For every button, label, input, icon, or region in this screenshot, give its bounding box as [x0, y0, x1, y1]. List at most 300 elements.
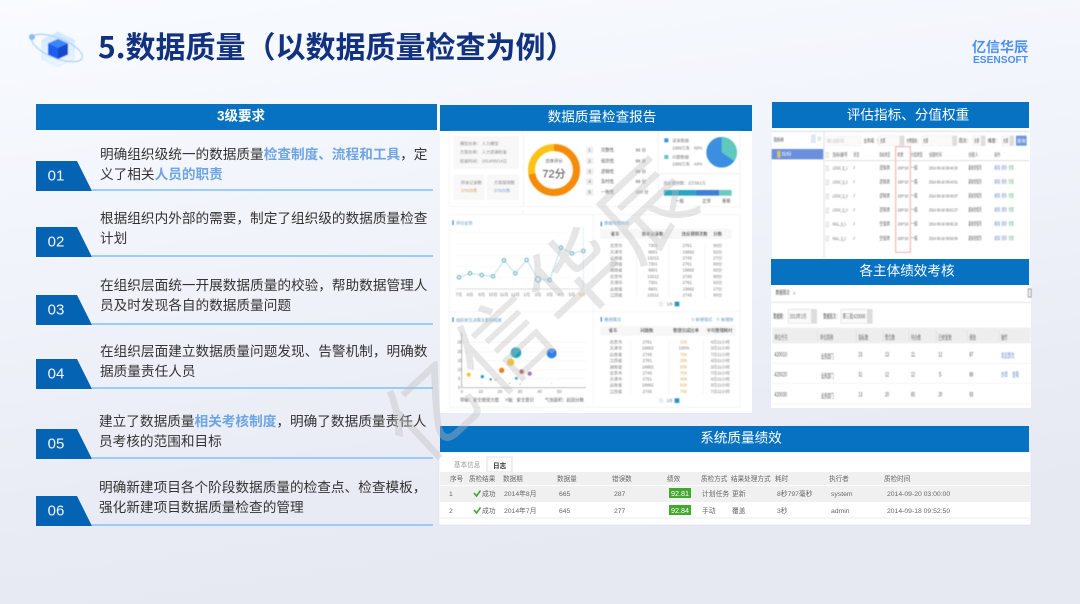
chart: violation stacked bar: 一般	[675, 197, 685, 204]
log table: 质检结果	[469, 474, 496, 483]
indicator table: 管理	[1009, 178, 1014, 185]
table: rectification status: 北京市	[610, 339, 622, 345]
report body background	[440, 131, 752, 413]
indicator table: LOGIC_Q_1	[833, 165, 848, 171]
score list	[586, 146, 649, 196]
heading: data quality report: 数据质量检查报告	[548, 110, 656, 124]
table: rectification status: 新增规式	[696, 316, 712, 322]
table: rectification status: 天津市	[610, 376, 622, 382]
table: 86	[969, 371, 974, 378]
score list: 88 分	[636, 157, 647, 164]
table	[772, 328, 1031, 404]
heading: system quality performance: 系统质量绩效	[700, 430, 782, 446]
indicator table: 一般	[911, 207, 918, 214]
indicator table: 空值类	[879, 221, 890, 228]
item 06: 06	[48, 502, 64, 520]
table: 5	[939, 371, 942, 378]
log table: 92.81	[671, 489, 689, 498]
chart: score trend line: 5月	[569, 292, 575, 297]
indicator table: /	[853, 179, 855, 185]
table: data rule scores: 92分	[713, 279, 722, 285]
indicator table: 逻辑类	[879, 207, 890, 214]
filters: 数据批次：	[823, 313, 839, 321]
indicator table: 超级管理员	[968, 164, 982, 171]
table: data rule scores: 7301	[648, 243, 658, 248]
indicator table: NULL_Q_2	[833, 236, 846, 242]
table: 12	[911, 371, 915, 378]
chart: bubble scatter: 30	[518, 389, 523, 394]
indicator table: 编辑	[994, 192, 1000, 199]
table: data rule scores: 13212	[647, 292, 660, 297]
table: 指标数	[858, 333, 869, 342]
indicator table: 2014-09-18 09:51:27	[929, 208, 958, 214]
chart: score trend line: 3月	[546, 292, 553, 297]
indicator table: 一般	[911, 192, 918, 199]
table: data rule scores: 违反规则次数	[682, 230, 708, 237]
filter toolbar: 查询	[1017, 137, 1026, 144]
chart: violation stacked bar: 重要	[722, 197, 731, 204]
log table: admin	[831, 508, 850, 515]
table: 业务部门	[821, 371, 834, 380]
indicator table: 逻辑类	[879, 178, 890, 185]
table: rectification status: 1/6	[667, 398, 673, 403]
log table: 1	[449, 491, 453, 498]
table: 87	[969, 352, 974, 359]
table: data rule scores: 92分	[713, 267, 722, 273]
log table: 绩效	[667, 474, 681, 483]
report metadata cards: 模型名称： 人力模型	[460, 140, 499, 146]
logo: ESENSOFT: 亿信华辰	[972, 39, 1028, 55]
log table: 2014-09-20 03:00:00	[887, 491, 950, 498]
log table: 数据量	[557, 474, 577, 483]
indicator table: 管理	[1009, 207, 1014, 214]
indicator table: 权重	[897, 151, 903, 158]
table: 20	[885, 391, 889, 398]
chart: bubble scatter: 50	[557, 389, 562, 394]
table: 420010	[774, 352, 787, 359]
log table: 耗时	[775, 474, 789, 483]
indicator table: /	[853, 222, 855, 228]
item 01: 明确组织级统一的数据质量检查制度、流程和工具，定	[100, 146, 428, 162]
table: rectification status: 19882	[642, 364, 654, 369]
log table: 665	[559, 491, 571, 498]
table: rectification status: 4月11小时	[711, 357, 730, 363]
logo: ESENSOFT	[972, 39, 1028, 66]
chart: data pie: 问题数据	[672, 153, 689, 159]
table: 93	[969, 391, 974, 398]
indicator table: 一般	[911, 235, 918, 242]
indicator table: 2014-09-18 09:56:09	[929, 236, 958, 242]
table: rectification status: 3月11小时	[711, 382, 730, 388]
indicators body background	[772, 128, 1030, 259]
item 02	[36, 211, 433, 257]
table: data rule scores: 90分	[713, 242, 722, 248]
filters: 2013年2月	[790, 313, 806, 321]
heading: entity performance: 各主体绩效考核	[859, 264, 955, 278]
log table: 结果处理方式	[731, 474, 771, 483]
table: 待办数	[911, 333, 921, 342]
table: 12	[885, 371, 889, 378]
chart: bubble scatter: 25	[457, 340, 463, 345]
table: data rule scores: 数据项规则分	[604, 219, 629, 225]
table: rectification status	[600, 316, 736, 403]
table: rectification status: 2761	[643, 340, 653, 345]
chart: violation stacked bar: 违反规则数：2万551万	[663, 180, 706, 186]
indicator table: 一般	[911, 178, 918, 185]
table: rectification status: 708	[680, 352, 688, 357]
chart: score trend line	[452, 219, 585, 297]
table: data rule scores: 1/6	[667, 302, 673, 307]
indicator table: 删除	[1002, 235, 1007, 242]
table: data rule scores: 2745	[683, 292, 693, 297]
chart: bubble scatter: 15	[457, 358, 463, 363]
indicator table: 100*10	[897, 165, 908, 171]
chart: data pie: 1898万条 44%	[672, 161, 703, 167]
chart: score trend line: 评分走势	[456, 219, 473, 225]
item 01: 01	[48, 168, 64, 184]
indicator table: 删除	[1002, 164, 1007, 171]
heading: level 3 requirements	[36, 104, 437, 130]
item 05: 建立了数据质量相关考核制度，明确了数据质量责任人	[99, 413, 427, 429]
filters: 数据期：	[773, 313, 786, 321]
chart: bubble scatter: 气泡面积：起因分数	[545, 397, 585, 404]
score list: 及时性	[601, 178, 615, 185]
indicator table: NULL_Q_1	[833, 222, 846, 228]
indicator table: 分值类型	[911, 151, 923, 158]
chart: bubble scatter: 20	[498, 389, 503, 394]
table: data rule scores: 90分	[713, 291, 722, 297]
table: rectification status: 509	[680, 383, 688, 388]
indicator table: 超级管理员	[968, 192, 982, 199]
heading: entity performance	[771, 259, 1029, 285]
filter toolbar: 全部	[974, 137, 979, 144]
table: 420030	[774, 391, 787, 398]
score list: 规范性	[601, 157, 615, 164]
chart: score trend line: 2月	[535, 292, 541, 297]
assessment table screenshot	[771, 289, 1031, 404]
panel: level 3 requirements	[36, 104, 437, 526]
table: rectification status: 新增除	[721, 316, 734, 322]
log table: 更新	[732, 489, 746, 498]
panel: entity performance assessment	[771, 259, 1031, 408]
item 03: 员及时发现各自的数据质量问题	[100, 298, 291, 313]
filter toolbar: 全部	[923, 137, 928, 144]
log table: 2	[449, 508, 453, 515]
panel: evaluation indicators and weights	[772, 102, 1030, 259]
indicator table: 100*10	[897, 222, 908, 228]
indicator table: LOGIC_Q_2	[833, 179, 848, 185]
indicator table: 状态	[853, 151, 859, 158]
chart: data pie	[664, 137, 737, 168]
table: 11	[911, 352, 915, 359]
indicator table: 100*10	[897, 208, 908, 214]
table: rectification status: 整改情况	[604, 316, 622, 322]
log table: 8秒797毫秒	[777, 489, 813, 498]
table: 已修复数	[938, 333, 952, 342]
table: data rule scores: 27分	[713, 285, 722, 291]
filter toolbar: 分类指标：	[906, 137, 920, 144]
table: 单位代号	[774, 333, 788, 342]
table: 办理	[1001, 370, 1008, 379]
item 06: 强化新建项目数据质量检查的管理	[99, 500, 304, 515]
heading: indicators and weights	[772, 102, 1029, 128]
table: 13	[885, 352, 889, 359]
item 01	[36, 146, 433, 191]
tabs: 日志	[493, 461, 507, 470]
chart: bubble scatter: 20	[457, 349, 463, 354]
chart: score trend line: 12月	[511, 292, 520, 297]
chart: bubble scatter: 5	[458, 376, 461, 381]
table: data rule scores: 湖南省	[610, 267, 622, 273]
assessment body background	[771, 285, 1031, 408]
indicator table: 创建时间	[929, 151, 942, 158]
indicator table screenshot	[772, 131, 1029, 258]
table: rectification status: 问题数	[640, 327, 654, 334]
indicator table: 一般	[911, 164, 918, 171]
chart: bubble scatter: 40	[537, 389, 543, 394]
item 04: 在组织层面建立数据质量问题发现、告警机制，明确数	[100, 344, 428, 359]
table: rectification status: 北京市	[610, 369, 622, 375]
table: 发起整改	[1001, 350, 1015, 359]
chart: data pie: 1898万条 56%	[672, 144, 703, 150]
indicator table: 操作	[994, 151, 1000, 158]
indicator table: 指标编号	[833, 151, 848, 158]
item 01: 义了相关人员的职责	[100, 166, 223, 182]
table: data rule scores: 7301	[648, 262, 658, 267]
score list: 2	[588, 158, 591, 163]
item 05: 员考核的范围和目标	[99, 434, 222, 449]
table: data rule scores: 资本记录数	[642, 230, 664, 237]
table: data rule scores: 分数	[713, 230, 723, 237]
chart: score trend line: 10月	[489, 292, 497, 297]
chart: bubble scatter: 0	[458, 385, 461, 390]
chart: score donut 72: 72分	[542, 167, 566, 180]
table: rectification status: 天津市	[610, 345, 622, 351]
indicator table: LOGIC_Q_3	[833, 193, 848, 199]
heading: level 3 requirements: 3级要求	[217, 108, 266, 124]
log table: 成功	[482, 506, 496, 515]
score list: 1	[588, 147, 591, 152]
indicator tree	[772, 134, 823, 159]
table: 操作	[1001, 333, 1008, 342]
table: rectification status: 整理完成比率	[673, 327, 700, 334]
chart: score trend line: 7月	[456, 292, 462, 297]
log table: 数据期	[503, 474, 523, 483]
table: rectification status: 7月11小时	[711, 388, 730, 394]
table: 20	[938, 391, 943, 398]
indicator tree: 指标	[782, 151, 792, 158]
indicator table: 逻辑类	[879, 164, 890, 171]
indicator table: 逻辑类	[879, 192, 890, 199]
log table: 质检方式	[701, 474, 728, 483]
filter toolbar: 输入指标代码	[828, 137, 845, 144]
indicator table: 一般	[911, 221, 918, 228]
title: 5.数据质量（以数据质量检查为例）	[98, 23, 575, 67]
score list: 3	[588, 169, 591, 174]
table: data rule scores: 北京市	[610, 273, 622, 279]
table: 13	[858, 391, 863, 398]
log table: 错误数	[612, 474, 632, 483]
table: rectification status: 2745	[643, 370, 653, 375]
chart: score trend line: 4月	[558, 292, 564, 297]
indicator table: 超级管理员	[968, 207, 982, 214]
table: data rule scores: 2745	[683, 274, 693, 279]
table: rectification status: 7月11小时	[711, 369, 730, 375]
indicator table: 管理	[1009, 164, 1014, 171]
watermark: 亿信华辰: 亿信华辰	[348, 122, 726, 486]
log table: system	[831, 491, 853, 498]
table: rectification status: 2761	[643, 358, 653, 363]
log table: 序号	[450, 474, 464, 483]
table: 绩效	[969, 333, 976, 342]
indicator table: 管理	[1009, 235, 1014, 242]
table: 业务部门	[821, 351, 834, 360]
log table: 执行者	[829, 474, 849, 483]
table: rectification status: 4月11小时	[711, 339, 730, 345]
report metadata cards: 37925条	[494, 187, 511, 193]
table: data rule scores: 6601	[648, 268, 658, 273]
indicator table: 超级管理员	[968, 235, 982, 242]
panel: system quality performance	[439, 426, 1031, 525]
table: data rule scores: 江西省	[610, 261, 622, 267]
chart: bubble scatter: 0	[461, 389, 464, 394]
item 02: 计划	[100, 231, 127, 246]
icon: glowing data cube	[28, 29, 86, 67]
table: rectification status: 19882	[642, 383, 654, 388]
score list: 一致性	[601, 189, 615, 196]
indicator table: /	[853, 165, 855, 171]
table: rectification status: 100%	[679, 346, 690, 351]
tabs	[454, 457, 512, 472]
item 04: 据质量责任人员	[100, 364, 196, 379]
log table: 287	[614, 491, 626, 498]
item 04: 04	[48, 366, 64, 382]
log table: 2014年7月	[504, 506, 536, 515]
table: rectification status: 平均整理耗时	[707, 327, 733, 334]
chart: score trend line: 9月	[478, 292, 485, 297]
log table	[440, 472, 1031, 518]
indicator table: 编辑	[994, 221, 1000, 228]
score list: 99 分	[636, 168, 647, 175]
table: data rule scores: 2761	[683, 262, 693, 267]
indicator table: 2014-09-18 09:44:51	[929, 179, 958, 185]
item 04	[36, 344, 433, 389]
score list: 96 分	[636, 146, 647, 153]
log table: 2014年8月	[504, 489, 536, 498]
assessment table screenshot: x	[793, 291, 796, 297]
table: data rule scores: 13212	[647, 255, 660, 260]
item 06	[36, 480, 433, 526]
table: 12	[938, 352, 943, 359]
table: data rule scores: 北京市	[610, 242, 622, 248]
score list: 4	[588, 179, 591, 184]
log table: 2014-09-18 09:52:50	[887, 508, 950, 515]
log table screenshot	[440, 457, 1031, 518]
indicator table: 删除	[1002, 221, 1007, 228]
chart: bubble scatter: 10	[478, 389, 484, 394]
table: rectification status: 309	[680, 377, 688, 382]
table: data rule scores: 2745	[683, 255, 693, 260]
indicator table: 删除	[1002, 178, 1007, 185]
panel: data quality inspection report	[440, 105, 752, 413]
table: rectification status: 3月11小时	[711, 345, 730, 351]
table: data rule scores: 云南省	[610, 254, 622, 260]
table: rectification status: 江西省	[610, 357, 622, 363]
indicator table: /	[853, 208, 855, 214]
table: rectification status: 云南省	[610, 351, 622, 357]
red highlight box: weight column	[896, 147, 910, 252]
report lower charts	[449, 210, 740, 407]
table: data rule scores: 6601	[648, 286, 658, 291]
table: 单位简称	[820, 333, 834, 342]
indicator table: 空值类	[879, 235, 890, 242]
table: 查看	[1012, 370, 1019, 379]
filter toolbar: 维度：	[988, 137, 1000, 144]
indicator table: 编辑	[994, 178, 1000, 185]
indicator table: 删除	[1002, 207, 1007, 214]
table: data rule scores: 省市	[611, 230, 620, 237]
item 06: 明确新建项目各个阶段数据质量的检查点、检查模板，	[99, 480, 426, 495]
indicator table: 删除	[1002, 192, 1007, 199]
indicator table: 指标类型	[879, 151, 890, 158]
item 05	[36, 413, 433, 459]
item 03: 在组织层面统一开展数据质量的校验，帮助数据管理人	[100, 277, 428, 293]
log table: 成功	[482, 489, 496, 498]
log table: 92.84	[671, 506, 689, 515]
system body background	[439, 452, 1031, 525]
indicator table: 超级管理员	[968, 178, 982, 185]
item 03	[36, 277, 433, 325]
item 02: 02	[48, 234, 64, 250]
indicator table: 超级管理员	[968, 221, 982, 228]
heading: system quality performance	[440, 426, 1029, 452]
table: rectification status: 云南省	[610, 382, 622, 388]
table: 业务部门	[821, 391, 834, 400]
log table: 质检时间	[884, 474, 911, 483]
report metadata cards: 方案名称： 人力资源检查	[460, 149, 507, 155]
score list: 完整性	[601, 146, 615, 153]
chart: bubble scatter: 带轴：安全感受力度	[460, 397, 500, 404]
indicator table: 编辑	[994, 207, 1000, 214]
filter toolbar: 周次：	[959, 137, 971, 144]
table: data rule scores: 2761	[683, 280, 693, 285]
indicator table	[825, 151, 1029, 242]
filters: 第三批420000	[843, 313, 866, 321]
table: data rule scores: 90分	[713, 273, 722, 279]
indicator table: 2014-09-18 09:44:20	[929, 165, 958, 171]
score list: 100 分	[636, 189, 649, 196]
assessment table screenshot: 数据周次	[776, 289, 790, 297]
indicator table: /	[853, 193, 855, 199]
chart: bubble scatter	[452, 316, 586, 404]
report metadata cards: 检查时间： 2014/05/14日	[460, 157, 507, 163]
table: rectification status: 4月11小时	[711, 376, 730, 382]
chart: score trend line: 1月	[523, 292, 530, 297]
indicator table: 管理	[1009, 192, 1014, 199]
heading: indicators and weights: 评估指标、分值权重	[847, 106, 969, 122]
chart: score trend line: 11月	[500, 292, 508, 297]
log table: 手动	[702, 506, 716, 515]
table: 警告数	[885, 333, 895, 342]
table: rectification status: 708	[680, 389, 688, 394]
indicator table: 100*10	[897, 179, 908, 185]
table: data rule scores: 27分	[713, 254, 722, 260]
log table: 277	[614, 508, 626, 515]
table: rectification status: 2761	[643, 377, 653, 382]
filters	[773, 309, 872, 323]
report metadata cards: 37925条	[461, 187, 478, 193]
table: 420020	[774, 371, 787, 378]
